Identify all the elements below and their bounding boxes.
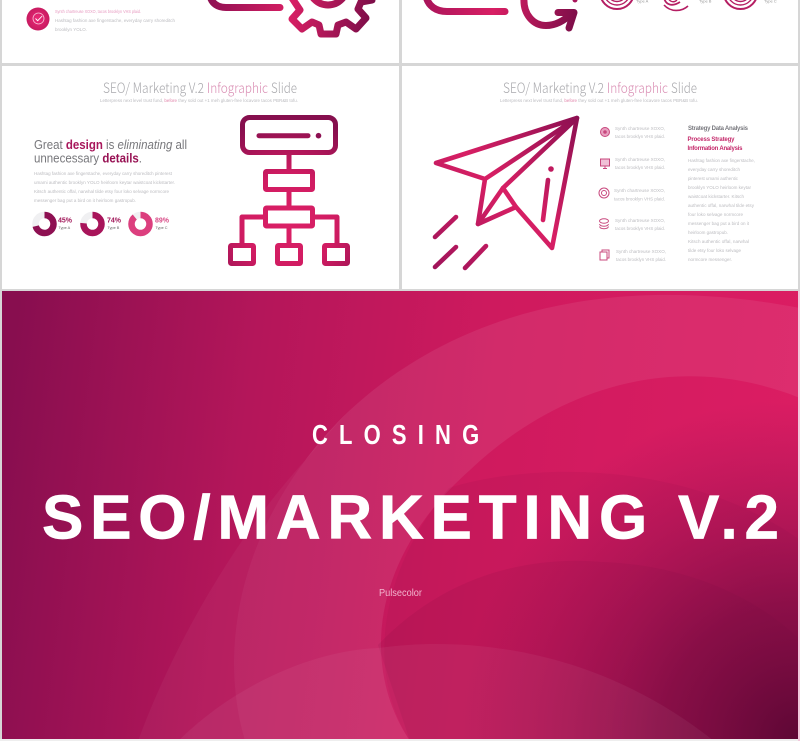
text block: top left caption: brooklyn YOLO.	[55, 27, 87, 32]
list item 2: tacos brooklyn VHS plaid.	[615, 165, 665, 170]
panel: closing slide	[0, 291, 800, 741]
list item 3	[599, 188, 665, 202]
list item 3: tacos brooklyn VHS plaid.	[614, 196, 665, 202]
text: strategy column body: normcore messenger.	[688, 257, 732, 262]
heading: design slide title: Infographic	[207, 78, 268, 98]
list item 1	[600, 126, 665, 139]
panel: top right slide fragment	[402, 0, 798, 63]
chart: donut type B 74%: Type B	[108, 226, 120, 230]
panel: paper plane slide	[402, 66, 798, 289]
icon: flowchart hierarchy	[230, 118, 348, 264]
heading: design slide title: SEO/ Marketing V.2	[103, 78, 204, 98]
icon: bar with circular arrow	[426, 0, 578, 28]
icon: gear with bar	[210, 0, 372, 34]
list item 1: Synth chartreuse XOXO,	[615, 126, 665, 131]
heading: plane slide title: Infographic	[607, 78, 668, 98]
text: strategy column heading	[688, 126, 749, 152]
text block: top left caption: Synth chartreuse XOXO, tacos brooklyn VHS plaid.	[55, 9, 141, 14]
text: statement body	[34, 171, 175, 203]
icon: paper plane	[435, 118, 577, 268]
chart: donut type B 74%	[84, 215, 122, 233]
title: SEO/MARKETING V.2: SEO/MARKETING V.2	[42, 484, 779, 552]
text: strategy column heading: Information Analysis	[688, 146, 743, 152]
text: strategy column body: pinterest umami authentic	[688, 176, 739, 181]
text: strategy column body: Kitsch authentic offal, narwhal	[688, 239, 749, 244]
text: statement body: messenger bag put a bird on it heirloom gastropub.	[34, 198, 136, 203]
heading: plane slide title: Slide	[671, 78, 697, 98]
text: strategy column body: four loko selvage normcore	[688, 212, 743, 217]
background: gradient with curved shapes	[2, 291, 800, 741]
text: plane slide subtitle: Letterpress next level trust fund, before they sold out +1 meh gluten-free locavore tacos PBR&B tofu.	[500, 98, 698, 103]
text: strategy column body: tilde etsy four loko selvage	[688, 248, 741, 253]
text: strategy column body: waistcoat kickstarter. Kitsch	[688, 194, 744, 199]
list item 5: Synth chartreuse XOXO,	[616, 249, 666, 254]
text: strategy column heading: Process Strategy	[688, 137, 735, 143]
chart: donut type C 89%	[132, 215, 170, 233]
list: feature icons and captions	[599, 126, 666, 262]
chart: donut type A 45%	[36, 215, 73, 233]
text: statement body: Kitsch authentic offal, narwhal tilde etsy four loko selvage normcore	[34, 189, 169, 194]
labels: ring types	[636, 0, 777, 4]
chart: partial ring type C	[724, 0, 758, 9]
list item 5	[600, 249, 666, 262]
chart: partial ring type A	[600, 0, 634, 9]
text: statement headline	[34, 138, 187, 166]
chart: donut type C 89%: 89%	[155, 218, 170, 224]
text: strategy column body	[688, 158, 755, 262]
list item 4: tacos brooklyn VHS plaid.	[615, 226, 665, 231]
text: strategy column heading: Strategy Data Analysis	[688, 126, 749, 132]
text block: top left caption	[55, 9, 175, 32]
list item 5: tacos brooklyn VHS plaid.	[616, 257, 666, 262]
chart: donut type A 45%: Type A	[58, 226, 71, 230]
list item 4	[600, 218, 665, 231]
text: closing label: CLOSING	[312, 420, 479, 451]
text: design slide subtitle: Letterpress next level trust fund, before they sold out +1 meh gluten-free locavore tacos PBR&B tofu.	[100, 98, 298, 103]
chart: partial ring type B	[664, 0, 688, 10]
panel: design slide	[2, 66, 399, 289]
text block: top left caption: Hashtag fashion axe fingerstache, everyday carry shoreditch	[55, 18, 175, 23]
text: statement body: umami authentic brooklyn YOLO heirloom keytar waistcoat kickstarter.	[34, 180, 175, 185]
text: strategy column body: authentic offal, narwhal tilde etsy	[688, 203, 755, 208]
text: strategy column body: brooklyn YOLO heirloom keytar	[688, 185, 751, 190]
text: strategy column body: messenger bag put a bird on it	[688, 221, 750, 226]
heading: plane slide title: SEO/ Marketing V.2	[503, 78, 604, 98]
text: strategy column body: heirloom gastropub.	[688, 230, 728, 235]
text: statement headline: Great design is eliminating all	[34, 138, 187, 152]
chart: donut type C 89%: Type C	[156, 226, 168, 230]
list item 2	[600, 157, 665, 170]
text: statement body: Hashtag fashion axe fingerstache, everyday carry shoreditch pinterest	[34, 171, 173, 176]
heading: design slide title: Slide	[271, 78, 297, 98]
chart: donut type A 45%: 45%	[58, 218, 73, 224]
heading: design slide title	[103, 78, 297, 98]
list item 1: tacos brooklyn VHS plaid.	[615, 134, 665, 139]
list item 4: Synth chartreuse XOXO,	[615, 218, 665, 223]
list item 3: Synth chartreuse XOXO,	[614, 188, 665, 193]
icon: check badge	[26, 8, 50, 30]
text: strategy column body: everyday carry shoreditch	[688, 167, 740, 172]
heading: plane slide title	[503, 78, 697, 98]
text: Pulsecolor credit: Pulsecolor	[379, 588, 423, 599]
chart: donut type B 74%: 74%	[107, 218, 122, 224]
list item 2: Synth chartreuse XOXO,	[615, 157, 665, 162]
panel: top left slide fragment	[2, 0, 399, 63]
text: statement headline: unnecessary details.	[34, 152, 142, 166]
text: strategy column body: Hashtag fashion axe fingerstache,	[688, 158, 755, 163]
